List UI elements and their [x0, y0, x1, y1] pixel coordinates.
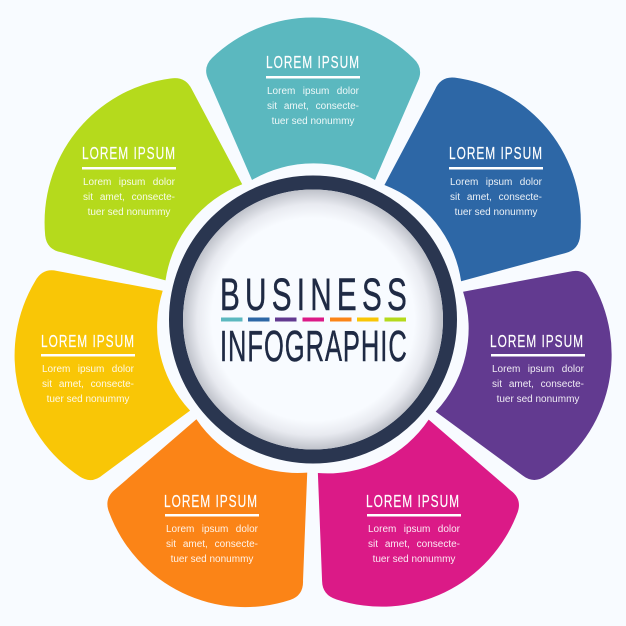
teal petal shape — [206, 18, 420, 180]
panel: teal petal — [206, 18, 420, 180]
teal body text: sit amet, consecte- — [267, 101, 359, 112]
magenta body text: Lorem ipsum dolor — [368, 524, 460, 535]
teal heading rule — [266, 76, 360, 78]
inner disc with shadow — [183, 190, 443, 450]
title line: business: BUSINESS — [220, 270, 407, 321]
green heading: LOREM IPSUM — [82, 144, 175, 164]
blue heading: LOREM IPSUM — [449, 144, 542, 164]
yellow petal shape — [0, 247, 200, 492]
purple petal shape — [426, 247, 626, 492]
orange body text — [166, 522, 258, 568]
purple body text — [492, 362, 584, 408]
magenta petal shape — [277, 400, 541, 626]
yellow heading rule — [41, 354, 135, 356]
panel: orange petal — [85, 400, 349, 626]
green body text: sit amet, consecte- — [83, 192, 175, 203]
magenta body text — [368, 522, 460, 568]
magenta body text: sit amet, consecte- — [368, 539, 460, 550]
yellow heading: LOREM IPSUM — [41, 332, 134, 352]
blue petal shape — [356, 48, 616, 316]
magenta body text: tuer sed nonummy — [373, 554, 455, 565]
purple heading rule — [491, 354, 585, 356]
panel: green petal — [10, 48, 270, 316]
teal body text — [267, 84, 359, 130]
panel: yellow petal — [0, 247, 200, 492]
teal body text: tuer sed nonummy — [272, 116, 354, 127]
orange heading rule — [165, 514, 259, 516]
magenta heading rule — [367, 514, 461, 516]
title line: infographic: INFOGRAPHIC — [220, 321, 407, 371]
yellow body text: sit amet, consecte- — [42, 379, 134, 390]
title — [220, 270, 407, 371]
yellow body text: Lorem ipsum dolor — [42, 364, 134, 375]
green heading rule — [82, 167, 176, 170]
panel: magenta petal — [277, 400, 541, 626]
panel: blue petal — [356, 48, 616, 316]
orange petal shape — [85, 400, 349, 626]
orange heading: LOREM IPSUM — [164, 492, 257, 512]
purple heading: LOREM IPSUM — [490, 332, 583, 352]
blue body text — [450, 175, 542, 221]
orange body text: tuer sed nonummy — [171, 554, 253, 565]
green petal shape — [10, 48, 270, 316]
green body text: Lorem ipsum dolor — [83, 177, 175, 188]
orange body text: Lorem ipsum dolor — [166, 524, 258, 535]
magenta heading: LOREM IPSUM — [366, 492, 459, 512]
teal body text: Lorem ipsum dolor — [267, 86, 359, 97]
purple body text: Lorem ipsum dolor — [492, 364, 584, 375]
orange body text: sit amet, consecte- — [166, 539, 258, 550]
panel: purple petal — [426, 247, 626, 492]
yellow body text: tuer sed nonummy — [47, 394, 129, 405]
blue body text: Lorem ipsum dolor — [450, 177, 542, 188]
green body text: tuer sed nonummy — [88, 207, 170, 218]
purple body text: sit amet, consecte- — [492, 379, 584, 390]
central circle — [176, 182, 450, 456]
blue heading rule — [449, 167, 543, 170]
colour bars — [221, 318, 406, 322]
green body text — [83, 175, 175, 221]
blue body text: sit amet, consecte- — [450, 192, 542, 203]
blue body text: tuer sed nonummy — [455, 207, 537, 218]
dark ring — [176, 182, 450, 456]
purple body text: tuer sed nonummy — [497, 394, 579, 405]
yellow body text — [42, 362, 134, 408]
teal heading: LOREM IPSUM — [266, 53, 359, 73]
